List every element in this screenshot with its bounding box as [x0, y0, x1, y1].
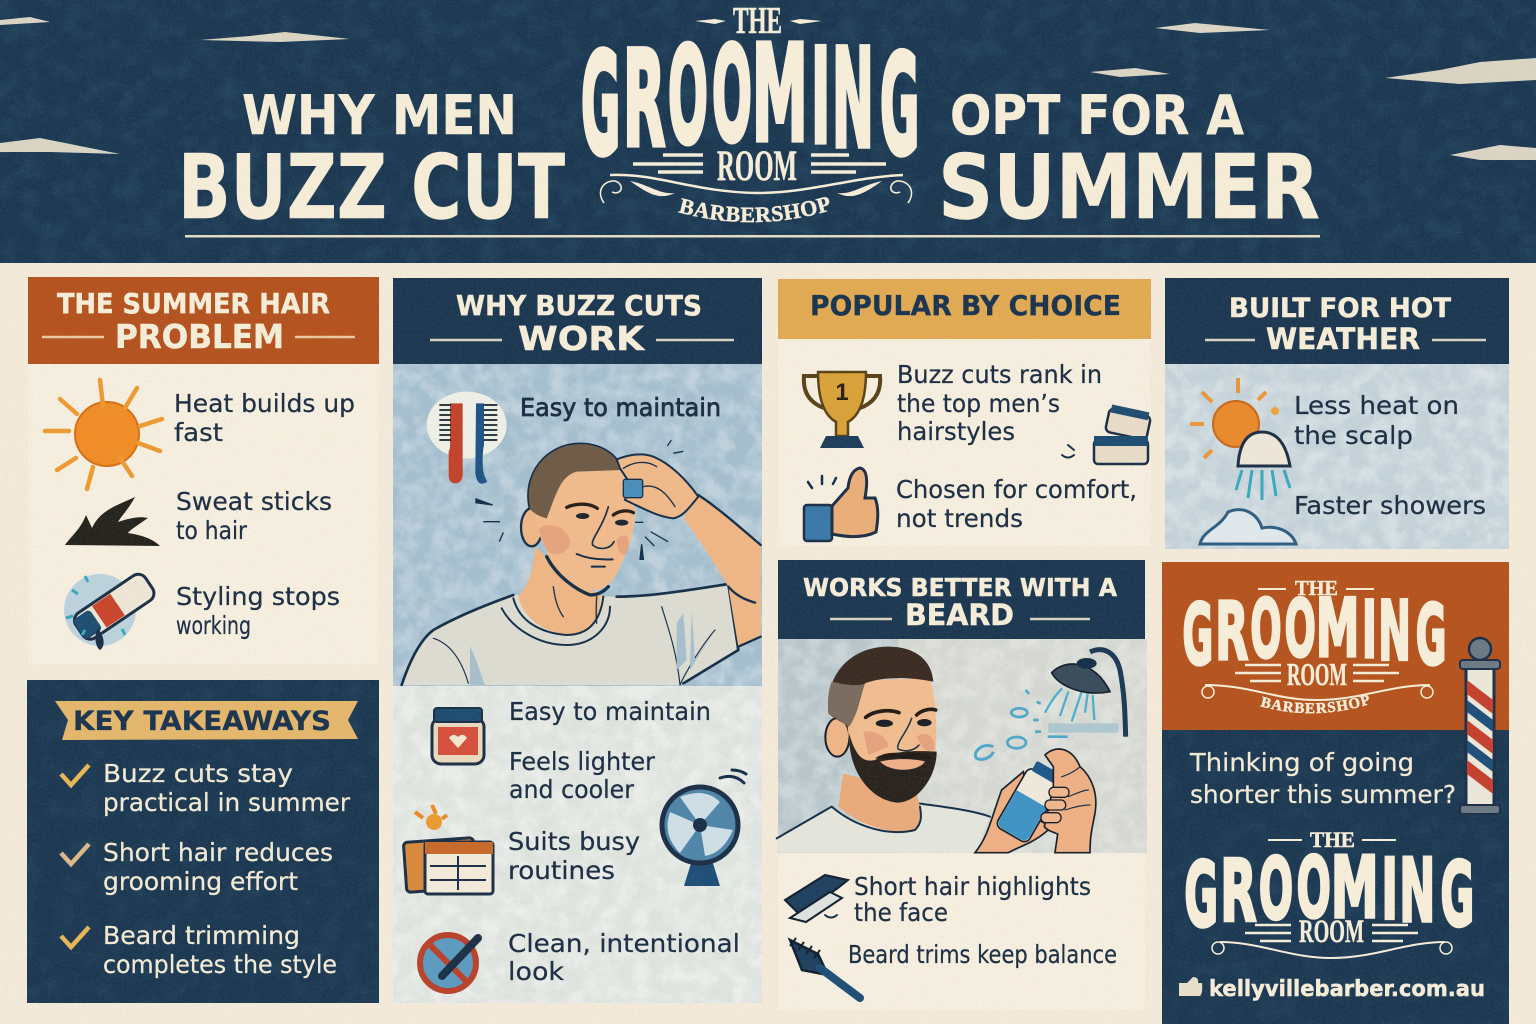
heading: key takeaways: KEY TAKEAWAYS — [73, 706, 331, 737]
text: suits busy routines: routines — [508, 856, 615, 885]
icon: sweaty hair — [65, 497, 160, 546]
heading: the summer hair problem: PROBLEM — [115, 317, 284, 356]
icon: no clippers — [420, 935, 478, 991]
heading: works better with a beard — [778, 560, 1145, 639]
icon: jar — [432, 708, 484, 764]
logo: orange: BARBERSHOP — [1260, 695, 1369, 714]
text: thinking of going shorter: shorter this summer? — [1190, 780, 1456, 809]
takeaway 3 — [61, 921, 337, 979]
headline left: BUZZ CUT — [178, 135, 565, 239]
takeaway 1: practical in summer — [103, 788, 351, 817]
icon: foam — [1200, 510, 1296, 544]
text: short hair highlights — [854, 872, 1091, 927]
logo: orange: THE — [1295, 576, 1338, 600]
icon: trophy — [804, 372, 880, 448]
header banner — [0, 0, 1536, 263]
text: less heat on the scalp: Less heat on — [1294, 391, 1459, 420]
logo: orange: O — [1250, 583, 1282, 676]
icon: sun and shower — [1190, 378, 1290, 500]
logo: The Grooming Room Barbershop: M — [752, 17, 808, 173]
heading: why buzz cuts work: WHY BUZZ CUTS — [456, 289, 702, 322]
icon: grooming jars — [1062, 405, 1151, 464]
text: feels lighter: Feels lighter — [509, 747, 656, 776]
heading: the summer hair problem — [28, 277, 379, 364]
panel: the summer hair problem — [28, 277, 379, 664]
text: sweat sticks: Sweat sticks — [176, 487, 332, 516]
logo: orange: O — [1285, 584, 1316, 675]
headline right: OPT FOR A — [950, 84, 1244, 147]
text: chosen for comfort: not trends — [896, 504, 1023, 533]
text: chosen for comfort: Chosen for comfort, — [896, 475, 1137, 504]
heading: built for hot weather: WEATHER — [1266, 322, 1420, 356]
illustration: bearded man with spray bottle — [777, 639, 1147, 853]
text: buzz cuts rank: hairstyles — [897, 417, 1015, 446]
heading: works better with a beard: WORKS BETTER WITH A — [803, 573, 1118, 602]
logo: navy: O — [1259, 839, 1293, 939]
logo: orange: ROOM — [1287, 656, 1347, 692]
panel: popular by choice — [778, 279, 1151, 546]
text: faster showers: Faster showers — [1294, 491, 1486, 520]
logo: navy — [1184, 827, 1474, 958]
text: less heat on the scalp: the scalp — [1294, 421, 1413, 450]
panel: key takeaways — [27, 680, 379, 1003]
website link: kellyvillebarber.com.au — [1209, 977, 1485, 1002]
text: styling stops: Styling stops — [176, 582, 340, 611]
text: chosen for comfort — [896, 475, 1137, 533]
text: styling stops: working — [176, 611, 251, 640]
body background — [1165, 364, 1509, 549]
takeaway 3: completes the style — [103, 950, 337, 979]
logo: The Grooming Room Barbershop: G — [581, 23, 620, 186]
text: less heat on the scalp — [1294, 391, 1459, 450]
text: short hair highlights: the face — [854, 898, 948, 927]
logo: The Grooming Room Barbershop: I — [811, 20, 830, 174]
takeaway 3: Beard trimming — [103, 921, 300, 950]
text: styling stops — [176, 582, 340, 640]
icon: fan — [662, 770, 746, 886]
illustration: man with buzz cut — [393, 364, 762, 686]
text: clean intentional look — [508, 929, 740, 986]
text: heat builds up: fast — [174, 418, 223, 447]
heading: built for hot weather — [1165, 278, 1509, 364]
heading: built for hot weather: BUILT FOR HOT — [1229, 293, 1452, 324]
icon: sun — [45, 380, 162, 489]
text: feels lighter — [509, 747, 656, 804]
text: clean intentional look: Clean, intentional — [508, 929, 740, 958]
text: heat builds up: Heat builds up — [174, 389, 355, 418]
logo: The Grooming Room Barbershop: O — [668, 18, 708, 174]
logo: orange — [1182, 576, 1446, 714]
heading: works better with a beard: BEARD — [905, 598, 1014, 632]
logo: navy: G — [1184, 843, 1218, 947]
logo: navy: M — [1331, 839, 1379, 938]
text: thinking of going shorter — [1189, 748, 1456, 809]
takeaway 2: grooming effort — [103, 867, 298, 896]
text: thinking of going shorter: Thinking of going — [1189, 748, 1414, 777]
logo: orange: R — [1215, 587, 1248, 679]
logo: orange: N — [1378, 586, 1411, 680]
text: heat builds up — [174, 389, 355, 447]
logo: The Grooming Room Barbershop: BARBERSHOP — [678, 197, 830, 222]
logo: The Grooming Room Barbershop: O — [712, 20, 752, 172]
text: beard trims: Beard trims keep balance — [848, 940, 1117, 969]
headline left — [178, 84, 565, 239]
icon: styling tube — [64, 571, 157, 650]
logo: navy: N — [1399, 841, 1435, 943]
illustration: man with buzz cut: Easy to maintain — [520, 393, 721, 422]
panel: built for hot weather — [1165, 278, 1509, 549]
logo: orange: I — [1362, 584, 1377, 676]
lower benefits list — [393, 686, 762, 1003]
text: suits busy routines — [508, 827, 640, 885]
takeaway 2 — [61, 838, 333, 896]
heading: the summer hair problem: THE SUMMER HAIR — [57, 287, 330, 320]
headline left: WHY MEN — [242, 84, 517, 147]
logo: The Grooming Room Barbershop: N — [832, 21, 874, 179]
text: clean intentional look: look — [508, 957, 565, 986]
logo: navy: I — [1381, 841, 1398, 938]
text: suits busy routines: Suits busy — [508, 827, 640, 856]
logo: The Grooming Room Barbershop: G — [880, 26, 919, 186]
text: short hair highlights: Short hair highlights — [854, 872, 1091, 901]
logo: navy: ROOM — [1299, 914, 1364, 950]
icon: barber pole — [1460, 638, 1500, 814]
icon: beard brush — [790, 938, 860, 998]
panel: works better with a beard — [777, 560, 1147, 1010]
logo: orange: M — [1316, 583, 1359, 676]
logo: The Grooming Room Barbershop: R — [623, 22, 665, 176]
text: sweat sticks — [176, 487, 332, 545]
text: buzz cuts rank: the top men’s — [897, 389, 1060, 418]
text: easy to maintain: Easy to maintain — [509, 697, 711, 726]
heading: popular by choice — [778, 279, 1151, 339]
headline right: SUMMER — [938, 135, 1320, 239]
heading: popular by choice: POPULAR BY CHOICE — [810, 289, 1121, 322]
text: buzz cuts rank — [897, 360, 1102, 446]
takeaway 2: Short hair reduces — [103, 838, 333, 867]
logo: The Grooming Room Barbershop — [581, 0, 919, 222]
logo: navy: G — [1441, 845, 1474, 947]
logo: navy: R — [1220, 844, 1257, 941]
heading: why buzz cuts work — [393, 278, 762, 364]
logo: orange: G — [1416, 588, 1446, 684]
takeaway 1: Buzz cuts stay — [103, 759, 293, 788]
logo: navy: THE — [1310, 827, 1355, 852]
text: buzz cuts rank: Buzz cuts rank in — [897, 360, 1102, 389]
panel: call to action — [1162, 562, 1509, 1024]
headline right — [938, 84, 1320, 239]
text: feels lighter: and cooler — [509, 775, 635, 804]
takeaway 1 — [61, 759, 351, 817]
icon: calendar — [403, 805, 493, 894]
icon: thumbs up — [804, 468, 878, 541]
logo: navy: O — [1297, 839, 1331, 937]
logo: The Grooming Room Barbershop: ROOM — [717, 143, 797, 190]
icon: clippers — [785, 875, 848, 922]
icon: trophy: 1 — [835, 379, 849, 406]
heading: why buzz cuts work: WORK — [518, 319, 646, 358]
logo: orange: G — [1182, 588, 1213, 684]
logo: The Grooming Room Barbershop: THE — [733, 0, 782, 42]
text: sweat sticks: to hair — [176, 516, 248, 545]
heading: key takeaways — [55, 701, 358, 740]
panel: why buzz cuts work — [393, 278, 762, 1003]
